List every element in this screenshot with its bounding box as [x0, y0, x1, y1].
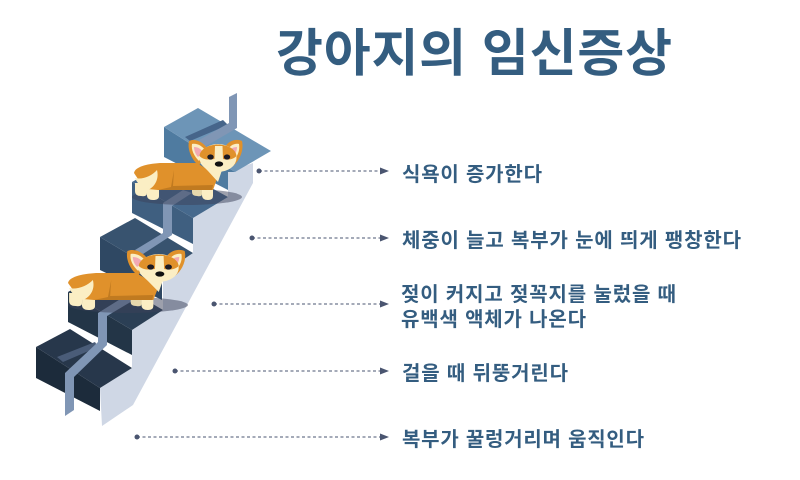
title: 강아지의 임신증상 — [276, 25, 672, 82]
illustration: staircase — [36, 93, 271, 426]
dog on lower step — [68, 250, 188, 313]
symptom 3 text — [401, 283, 676, 331]
symptom 3 text: 유백색 액체가 나온다 — [401, 308, 586, 331]
step 4 — [68, 273, 163, 355]
symptom 1 text: 식욕이 증가한다 — [402, 163, 542, 186]
arrow: symptom 2 — [250, 234, 389, 242]
carpet runner — [65, 93, 237, 416]
dog on upper step — [132, 140, 243, 205]
stair side wall — [100, 163, 253, 426]
arrow: symptom 4 — [172, 368, 389, 374]
symptom 4 text: 걸을 때 뒤뚱거린다 — [402, 362, 568, 385]
step 5 (bottom) — [36, 329, 132, 411]
arrow: symptom 5 — [134, 434, 389, 440]
arrow: symptom 1 — [256, 168, 389, 174]
symptom 3 text: 젖이 커지고 젖꼭지를 눌렀을 때 — [401, 283, 676, 306]
step 2 — [132, 163, 228, 244]
step 1 (top) — [164, 108, 271, 190]
arrow: symptom 3 — [212, 300, 389, 308]
step 3 — [100, 218, 193, 300]
symptom 2 text: 체중이 늘고 복부가 눈에 띄게 팽창한다 — [402, 229, 741, 252]
symptom 5 text: 복부가 꿀렁거리며 움직인다 — [402, 428, 644, 451]
